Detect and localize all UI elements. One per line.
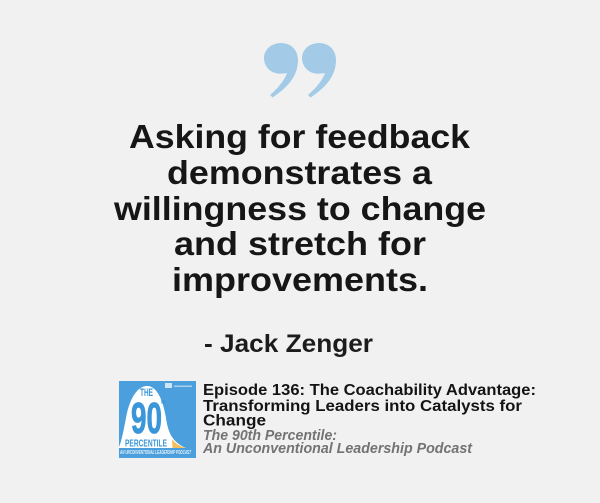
episode title	[203, 382, 536, 430]
icon: podcast cover logo: 90	[131, 394, 162, 443]
podcast name	[202, 427, 473, 457]
quote text: and stretch for	[174, 225, 426, 262]
quote text: Asking for feedback	[129, 118, 471, 155]
icon: quotation marks	[264, 43, 336, 98]
icon: podcast cover logo: PERCENTILE	[125, 438, 167, 450]
podcast name: An Unconventional Leadership Podcast	[202, 440, 473, 457]
podcast name: The 90th Percentile:	[203, 427, 337, 444]
quote text: demonstrates a	[167, 154, 433, 191]
icon: podcast cover logo: th	[161, 400, 166, 406]
quote text	[113, 118, 486, 298]
quote text: willingness to change	[113, 190, 486, 227]
quote attribution: - Jack Zenger	[204, 330, 373, 358]
quote text: improvements.	[172, 261, 428, 298]
episode title: Change	[203, 412, 266, 430]
icon: podcast cover logo: THE	[140, 387, 153, 399]
icon: podcast cover logo	[119, 381, 196, 458]
episode title: Transforming Leaders into Catalysts for	[203, 398, 522, 415]
icon: podcast cover logo: AN UNCONVENTIONAL LEADERSHIP PODCAST	[119, 450, 192, 456]
episode title: Episode 136: The Coachability Advantage:	[203, 382, 536, 399]
